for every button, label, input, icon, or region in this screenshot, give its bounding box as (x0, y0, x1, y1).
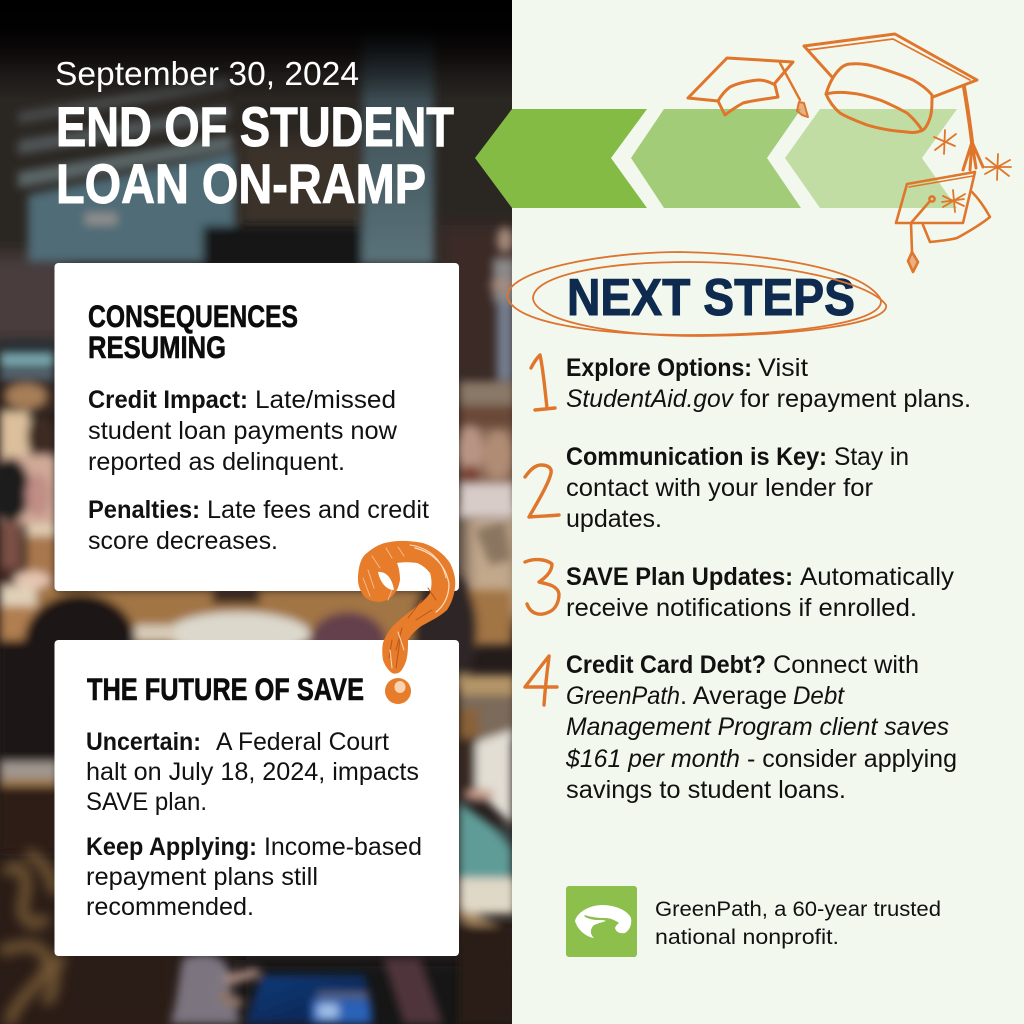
icon: GreenPath logo (566, 886, 637, 957)
date line: September 30, 2024 (55, 55, 359, 92)
photo: lecture hall audience (0, 0, 540, 1024)
icon: large cap (804, 34, 977, 133)
step 4 text: savings to student loans. (566, 776, 846, 804)
step 3 text: receive notifications if enrolled. (566, 594, 917, 622)
text: uncertain (86, 728, 419, 816)
step 1 text: Visit (758, 354, 808, 382)
text: keep applying: Income-based (264, 833, 422, 861)
right strip (497, 227, 513, 253)
text: uncertain: halt on July 18, 2024, impacts (86, 758, 419, 786)
step 2 text: Communication is Key: (566, 443, 827, 471)
heading: future of save: THE FUTURE OF SAVE (87, 671, 364, 707)
text: uncertain: A Federal Court (216, 728, 389, 756)
arrow chevrons (475, 109, 957, 208)
step 4 text: Connect with (773, 651, 919, 679)
chevron 1 (475, 109, 647, 208)
icon: small cap lower right (896, 172, 990, 272)
step numerals (525, 355, 559, 705)
step 1 text: for repayment plans. (740, 385, 971, 413)
step 4 text: $161 per month (565, 745, 740, 773)
step 2 text: Stay in (834, 443, 909, 471)
icon: graduation caps doodle (688, 34, 1011, 272)
heading: consequences (88, 298, 298, 365)
icon: tassel (963, 87, 983, 170)
seats and audience between the cards (0, 590, 512, 645)
numeral 4 (525, 656, 557, 705)
heading: consequences: CONSEQUENCES (88, 298, 298, 334)
numeral 1 (531, 355, 555, 410)
text: credit impact: student loan payments now (88, 417, 398, 445)
numeral 2 (525, 465, 559, 517)
text: keep applying: Keep Applying: (86, 833, 257, 861)
step 2 text (566, 443, 909, 533)
text: credit impact: reported as delinquent. (88, 448, 345, 476)
text: keep applying (86, 833, 422, 921)
text: GreenPath tagline: national nonprofit. (655, 925, 839, 949)
icon: small cap left (688, 58, 808, 117)
text: GreenPath tagline (655, 897, 941, 949)
text: uncertain: SAVE plan. (86, 788, 207, 816)
step 2 text: contact with your lender for (566, 474, 873, 502)
text: credit impact: Late/missed (255, 386, 396, 414)
title: LOAN ON-RAMP (56, 152, 426, 215)
text: credit impact (88, 386, 398, 476)
icon: sparkles (934, 130, 1011, 212)
step 4 text: Credit Card Debt? (566, 651, 766, 679)
step 4 text: . Average (680, 682, 787, 710)
text: uncertain: Uncertain: (86, 728, 201, 756)
icon: orange question mark (358, 541, 455, 704)
step 1 text (566, 354, 971, 413)
step 3 text: Automatically (800, 563, 955, 591)
title: END OF STUDENT (56, 95, 454, 158)
text: keep applying: recommended. (86, 893, 254, 921)
chevron 2 (631, 109, 801, 208)
heading: next steps: NEXT STEPS (567, 269, 855, 327)
text: penalties: score decreases. (88, 527, 278, 555)
text: GreenPath tagline: GreenPath, a 60-year trusted (655, 897, 941, 921)
step 3 text (566, 563, 955, 622)
left of lower card (0, 640, 60, 764)
step 1 text: StudentAid.gov (566, 385, 734, 413)
text: penalties (88, 496, 429, 555)
panel: consequences resuming (54, 263, 459, 591)
question mark scribbles (363, 545, 449, 668)
text: credit impact: Credit Impact: (88, 386, 248, 414)
scribbled ellipse around next steps (507, 252, 886, 336)
step 1 text: Explore Options: (566, 354, 752, 382)
step 3 text: SAVE Plan Updates: (566, 563, 793, 591)
question mark highlight (378, 572, 394, 590)
step 2 text: updates. (566, 505, 662, 533)
title (56, 95, 454, 215)
text: penalties: Late fees and credit (207, 496, 429, 524)
right of lower card (459, 675, 515, 695)
numeral 3 (525, 560, 559, 614)
left strip (0, 340, 54, 380)
text: penalties: Penalties: (88, 496, 200, 524)
step 4 text: Debt (793, 682, 845, 710)
question mark dot (385, 678, 411, 704)
step 4 text: - consider applying (747, 745, 957, 773)
chevron 3 (785, 109, 957, 208)
panel: the future of SAVE (54, 640, 459, 956)
text: keep applying: repayment plans still (86, 863, 318, 891)
bottom strip (170, 955, 240, 1024)
step 4 text (565, 651, 957, 804)
heading: consequences: RESUMING (88, 329, 226, 365)
step 4 text: GreenPath (566, 682, 680, 710)
step 4 text: Management Program client saves (566, 713, 949, 741)
